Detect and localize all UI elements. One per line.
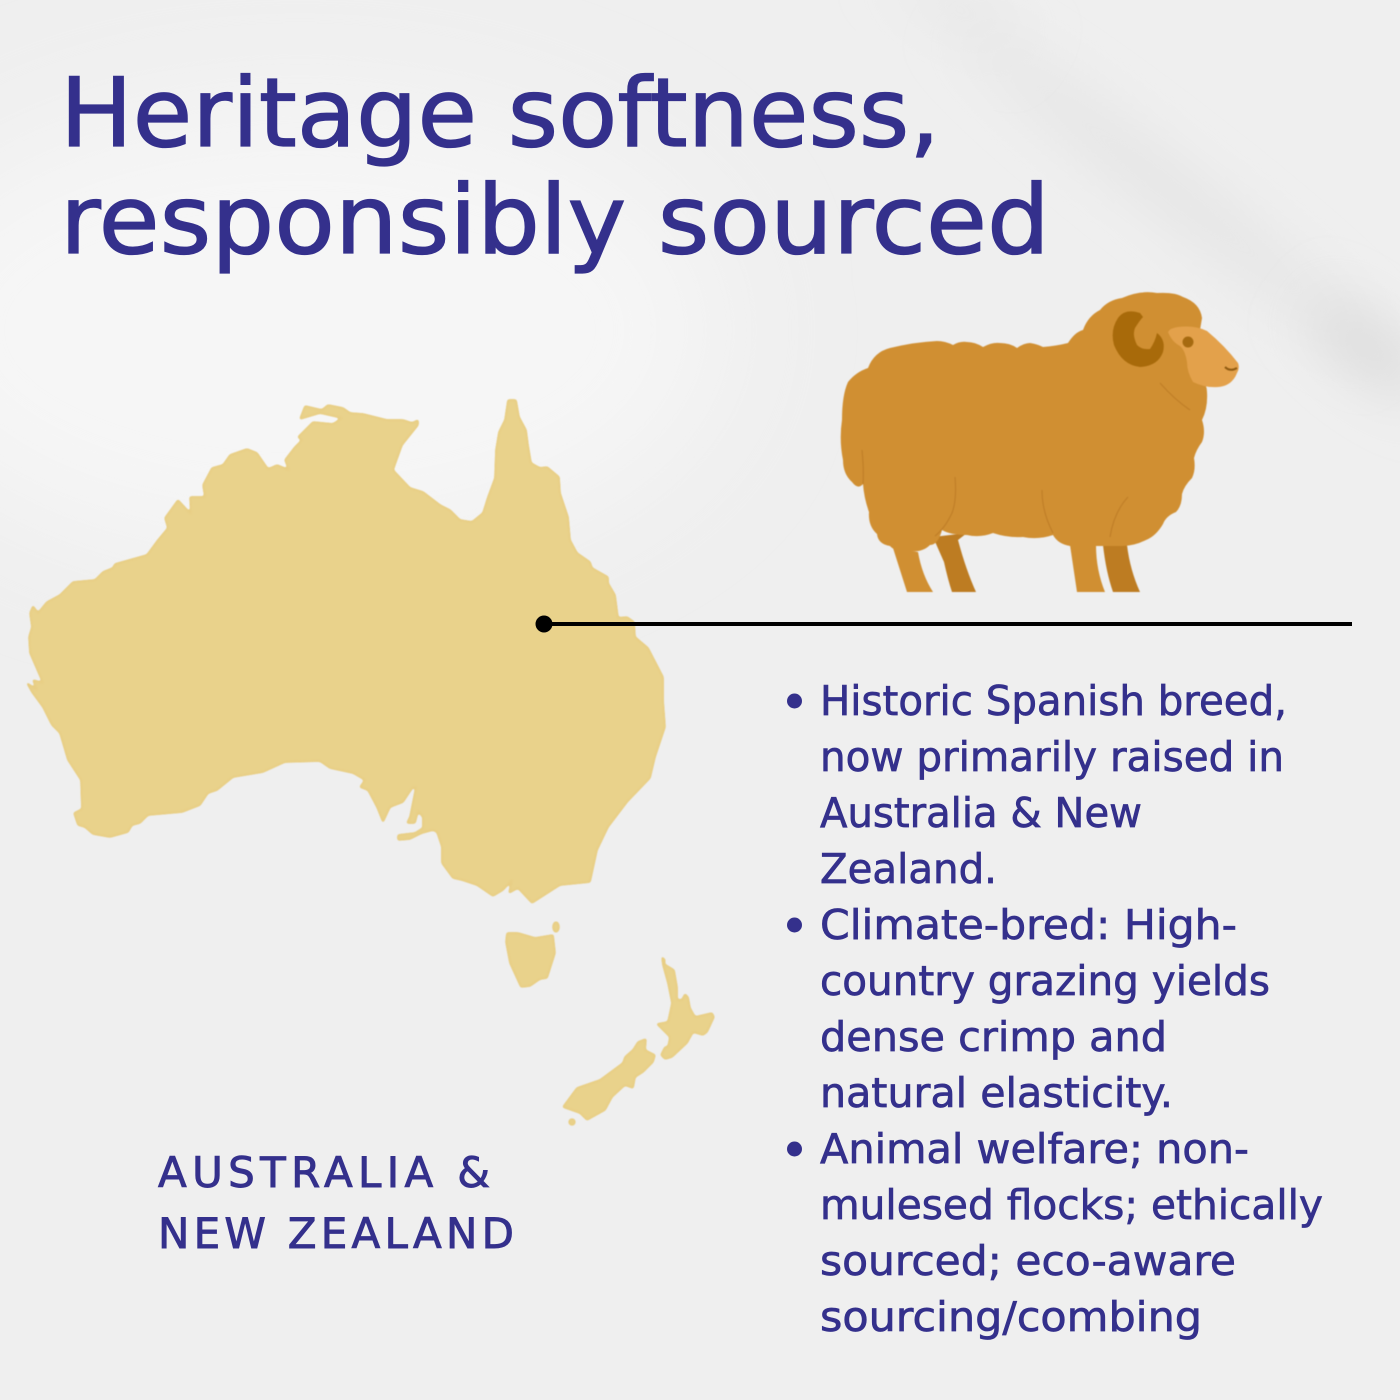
title: Heritage softness, (60, 59, 940, 169)
bullet: breed origin (787, 677, 1287, 893)
icon: merino sheep (841, 292, 1239, 592)
region label (158, 1148, 514, 1258)
bullet: breed origin: Australia & New (820, 789, 1142, 837)
map: New Zealand North Island (657, 957, 714, 1059)
bullet: climate-bred: Climate-bred: High- (820, 901, 1237, 949)
map: Australia and New Zealand (27, 400, 714, 1125)
bullet: climate-bred (787, 901, 1270, 1117)
map: Stewart Island (569, 1119, 575, 1125)
bullet: animal welfare: sourcing/combing (820, 1293, 1202, 1341)
bullet: breed origin: Zealand. (820, 845, 997, 893)
title (60, 59, 1050, 276)
sheep wool folds (862, 383, 1190, 537)
sheep near legs (893, 545, 1105, 592)
bullet: animal welfare: Animal welfare; non- (820, 1125, 1249, 1173)
region label: NEW ZEALAND (158, 1209, 514, 1258)
map: mainland Australia (27, 400, 665, 903)
sheep face (1168, 326, 1239, 387)
connector line with dot (536, 616, 1352, 632)
bullet: climate-bred: dense crimp and (820, 1013, 1167, 1061)
map: Tasmania (506, 933, 555, 987)
bullet: animal welfare: sourced; eco-aware (820, 1237, 1236, 1285)
region label: AUSTRALIA & (158, 1148, 490, 1197)
bullet: climate-bred: country grazing yields (820, 957, 1270, 1005)
sheep eye (1182, 336, 1194, 348)
sheep horn (1113, 311, 1164, 367)
title: responsibly sourced (60, 166, 1050, 276)
map: Flinders Island (553, 922, 559, 932)
sheep body (841, 292, 1207, 551)
bullet: climate-bred: natural elasticity. (820, 1069, 1173, 1117)
map: New Zealand South Island (563, 1039, 655, 1120)
bullet: animal welfare: mulesed flocks; ethically (820, 1181, 1323, 1229)
bullet: breed origin: Historic Spanish breed, (820, 677, 1287, 725)
bullet: animal welfare (787, 1125, 1323, 1341)
bullet: breed origin: now primarily raised in (820, 733, 1284, 781)
bullet list (787, 677, 1323, 1341)
sheep far legs (933, 533, 1140, 592)
sheep mouth (1225, 367, 1237, 370)
